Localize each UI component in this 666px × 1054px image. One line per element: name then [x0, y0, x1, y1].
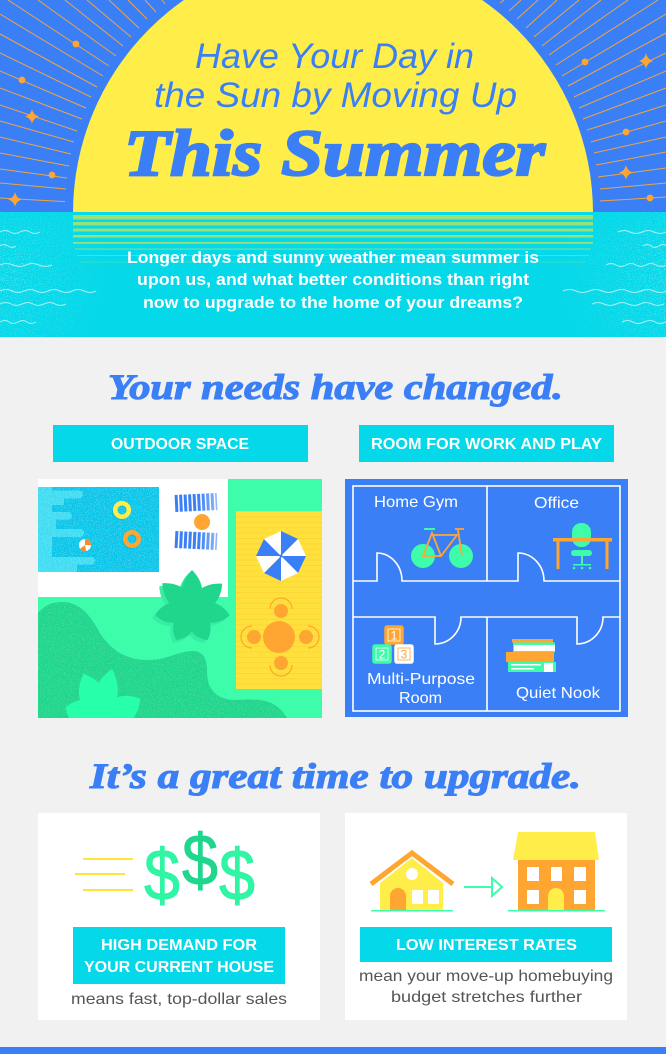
room label: multi-purpose room [367, 671, 475, 707]
sky stars [8, 53, 653, 207]
sea sparkle [0, 212, 666, 337]
icon: bicycle [411, 528, 473, 568]
label: high demand [73, 927, 285, 984]
label: low interest rates: LOW INTEREST RATES [396, 937, 577, 954]
lounge chair bottom [175, 540, 217, 542]
lounge chair top [175, 502, 217, 504]
dark lawn patch [38, 602, 287, 718]
label: outdoor space: OUTDOOR SPACE [111, 436, 249, 453]
pool ring: yellow [114, 503, 129, 518]
room label: office: Office [534, 495, 579, 512]
label: low interest rates [360, 927, 612, 962]
sun rays [0, 0, 666, 202]
sun [73, 0, 593, 213]
pool ring: orange [124, 532, 139, 547]
room label: home gym: Home Gym [374, 494, 458, 511]
intro text [127, 249, 539, 312]
intro text: Longer days and sunny weather mean summer is [127, 249, 539, 267]
intro text: upon us, and what better conditions than right [137, 271, 530, 289]
panel: backyard illustration [38, 479, 322, 718]
panel: header sunset [0, 0, 666, 337]
intro text: now to upgrade to the home of your dreams? [143, 294, 523, 312]
room label: multi-purpose room: Room [399, 690, 442, 707]
title [124, 37, 547, 190]
label: room for work and play [359, 425, 614, 462]
icon: big house [508, 832, 605, 912]
sea [0, 212, 666, 337]
caption: budget stretches: budget stretches further [391, 989, 583, 1006]
palm tree light [66, 669, 140, 718]
caption: budget stretches: mean your move-up homebuying [359, 968, 613, 985]
icon: toy blocks [373, 626, 413, 663]
icon: dollar signs: $ [219, 836, 255, 916]
icon: dollar signs: $ [182, 821, 218, 901]
room label: multi-purpose room: Multi-Purpose [367, 671, 475, 688]
icon: dollar signs: $ [144, 836, 180, 916]
title: This Summer [124, 117, 547, 190]
room label: quiet nook: Quiet Nook [516, 685, 601, 702]
label: high demand: YOUR CURRENT HOUSE [84, 959, 274, 976]
umbrella [256, 531, 306, 581]
arrow [464, 878, 502, 896]
icon: dollar signs [144, 821, 255, 916]
lawn [38, 479, 322, 718]
heading: great time to upgrade: It’s a great time to upgrade. [89, 756, 581, 796]
panel: floor plan [345, 479, 628, 717]
icon: small house [371, 853, 453, 912]
side table [194, 514, 210, 530]
sky [0, 0, 666, 213]
heading: your needs have changed: Your needs have changed. [108, 367, 563, 407]
title: the Sun by Moving Up [154, 76, 517, 115]
waves [0, 230, 666, 324]
caption: budget stretches [359, 968, 613, 1006]
label: outdoor space [53, 425, 308, 462]
icon: toy blocks: 2 [379, 648, 386, 662]
label: high demand: HIGH DEMAND FOR [101, 937, 257, 954]
patio [38, 479, 228, 597]
panel: low interest card [345, 813, 627, 1020]
caption: fast sales: means fast, top-dollar sales [71, 991, 287, 1008]
icon: books [506, 639, 556, 672]
patio table and chairs [241, 598, 319, 676]
icon: desk and chair [553, 523, 612, 569]
beach ball [79, 539, 91, 551]
floor plan walls [353, 486, 620, 711]
icon: toy blocks: 1 [391, 628, 398, 642]
footer bar [0, 1047, 666, 1054]
deck [236, 511, 322, 689]
label: room for work and play: ROOM FOR WORK AND PLAY [371, 436, 602, 453]
speed lines [75, 858, 133, 891]
panel: high demand card [38, 813, 320, 1020]
sky dots [19, 41, 653, 201]
palm tree dark [151, 570, 231, 648]
swimming pool [30, 487, 159, 572]
sun reflection [73, 215, 593, 262]
title: Have Your Day in [195, 37, 474, 76]
icon: toy blocks: 3 [401, 648, 408, 662]
